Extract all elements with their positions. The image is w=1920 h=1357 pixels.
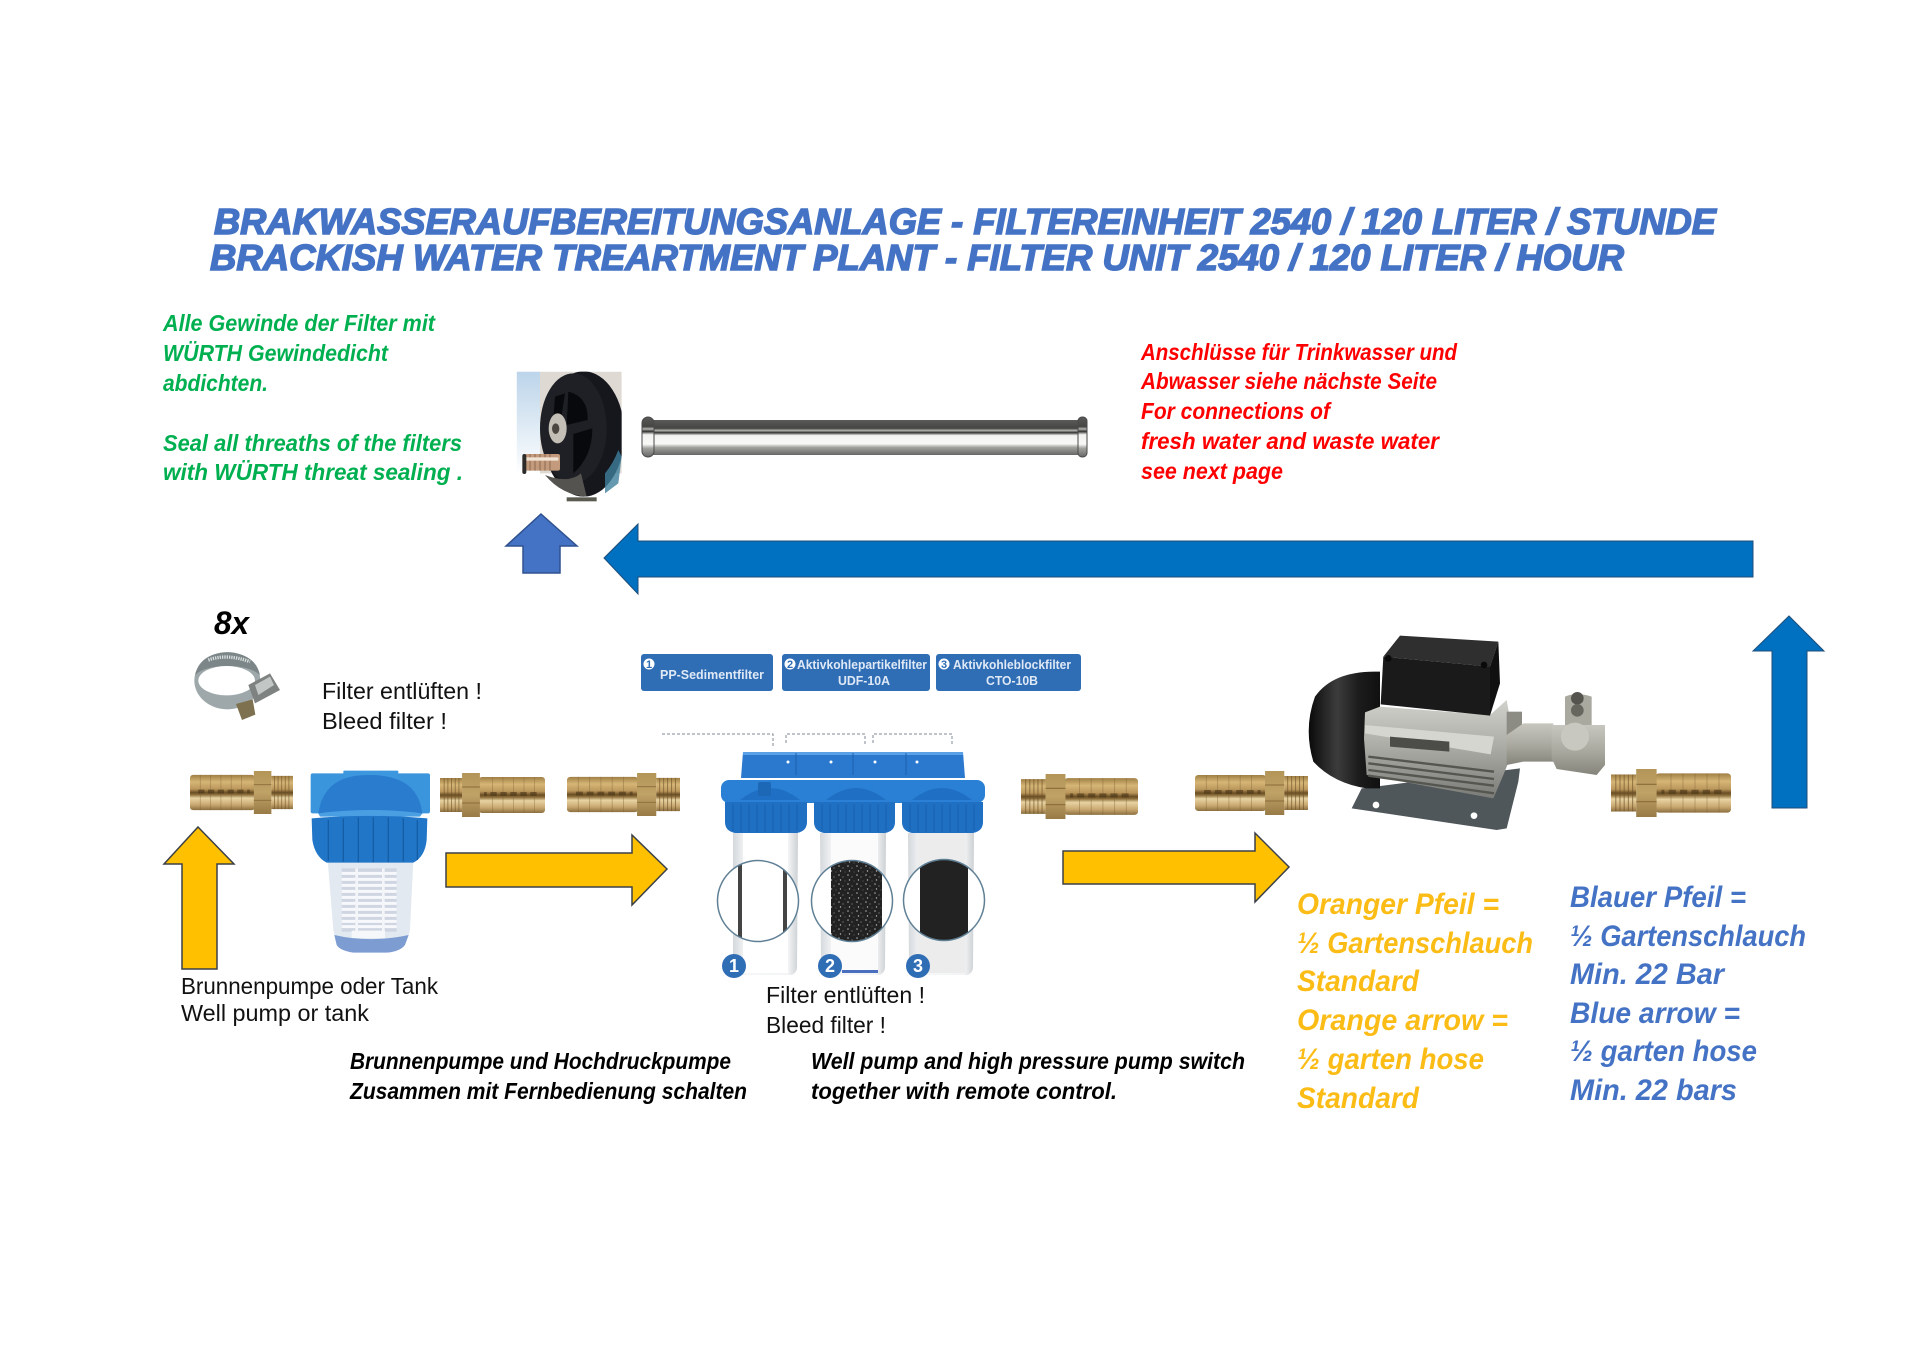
arrow: blue up right [1753, 616, 1824, 808]
text: well pump or tank: Brunnenpumpe oder Tank [181, 973, 438, 999]
legend: blue arrow: Min. 22 bars [1570, 1074, 1737, 1107]
text: pumps remote control English: together with remote control. [811, 1078, 1117, 1104]
legend: orange arrow: Orange arrow = [1297, 1004, 1508, 1037]
text: bleed filter 2 [766, 982, 925, 1038]
dashed flow lines [662, 734, 952, 746]
number badge 1 [722, 954, 746, 978]
single pre-filter [311, 771, 430, 953]
label: activated carbon particle filter: Aktivkohlepartikelfilter [797, 658, 927, 672]
legend: blue arrow: ½ garten hose [1570, 1035, 1757, 1068]
text: pumps remote control German: Brunnenpumpe und Hochdruckpumpe [350, 1048, 731, 1074]
text: well pump or tank: Well pump or tank [181, 1000, 370, 1026]
text: pumps remote control German: Zusammen mit Fernbedienung schalten [349, 1078, 747, 1104]
legend: orange arrow: Standard [1297, 1082, 1420, 1115]
icon: hose clamp [194, 652, 280, 720]
number badge 2 [818, 954, 842, 978]
legend: orange arrow: Oranger Pfeil = [1297, 888, 1499, 921]
green note: seal threads [162, 310, 463, 485]
title: BRACKISH WATER TREARTMENT PLANT - FILTER UNIT 2540 / 120 LITER / HOUR [210, 237, 1624, 278]
legend: orange arrow: Standard [1297, 965, 1420, 998]
title [210, 201, 1717, 278]
brass fitting 2 [440, 773, 545, 817]
legend: orange arrow: ½ garten hose [1297, 1043, 1484, 1076]
magnifier circle 2 [811, 855, 893, 945]
title: BRAKWASSERAUFBEREITUNGSANLAGE - FILTEREINHEIT 2540 / 120 LITER / STUNDE [214, 201, 1717, 242]
brass fitting 3 [567, 773, 680, 816]
label: activated carbon block filter: 3 [941, 659, 947, 671]
text: well pump or tank [181, 973, 438, 1026]
text: bleed filter 1: Bleed filter ! [322, 708, 447, 734]
legend: orange arrow [1297, 888, 1533, 1115]
brass fitting 5 [1195, 771, 1308, 815]
label: activated carbon block filter: Aktivkohleblockfilter [953, 658, 1071, 672]
text: bleed filter 2: Bleed filter ! [766, 1012, 886, 1038]
legend: blue arrow: Blauer Pfeil = [1570, 881, 1746, 914]
magnifier circle 3 [903, 855, 985, 945]
text: pumps remote control English [811, 1048, 1245, 1104]
arrow: orange up [164, 827, 234, 969]
green note: seal threads: WÜRTH Gewindedicht [163, 340, 389, 366]
label: PP sediment filter: PP-Sedimentfilter [660, 668, 764, 682]
text: pumps remote control English: Well pump and high pressure pump switch [811, 1048, 1245, 1074]
magnifier circle 1 [717, 855, 799, 945]
red note: connections: see next page [1141, 458, 1283, 484]
legend: blue arrow: Min. 22 Bar [1570, 958, 1726, 991]
label: PP sediment filter: 1 [646, 659, 652, 671]
legend: blue arrow: ½ Gartenschlauch [1570, 920, 1806, 953]
arrow: orange right 1 [446, 835, 667, 905]
stainless membrane tube [642, 417, 1087, 457]
brass fitting 4 [1021, 774, 1138, 819]
label: activated carbon particle filter: 2 [787, 659, 793, 671]
red note: connections: fresh water and waste water [1141, 428, 1440, 454]
text: bleed filter 1: Filter entlüften ! [322, 678, 482, 704]
red note: connections: Anschlüsse für Trinkwasser und [1140, 339, 1458, 365]
green note: seal threads: abdichten. [163, 370, 268, 396]
number badge 1: 1 [729, 956, 739, 976]
bowls [733, 833, 974, 975]
green note: seal threads: Alle Gewinde der Filter mit [162, 310, 436, 336]
arrow: small blue up [506, 514, 577, 573]
red note: connections: Abwasser siehe nächste Seite [1140, 368, 1437, 394]
membrane housing end cap [517, 371, 624, 503]
legend: orange arrow: ½ Gartenschlauch [1297, 927, 1533, 960]
blue head and collars [721, 752, 985, 833]
legend: blue arrow [1570, 881, 1806, 1107]
triple filter unit [662, 734, 985, 978]
green note: seal threads: with WÜRTH threat sealing . [163, 459, 463, 485]
label: PP sediment filter [641, 654, 773, 691]
red note: connections: For connections of [1141, 398, 1332, 424]
red note: connections [1140, 339, 1458, 484]
label: activated carbon particle filter: UDF-10A [838, 674, 890, 688]
number badge 2: 2 [825, 956, 835, 976]
green note: seal threads: Seal all threaths of the filters [163, 430, 462, 456]
number badge 3: 3 [913, 956, 923, 976]
label: activated carbon block filter [936, 654, 1081, 691]
number badge 3 [906, 954, 930, 978]
brass fitting 6 [1611, 769, 1731, 817]
text: pumps remote control German [349, 1048, 747, 1104]
pump and motor [1309, 636, 1605, 830]
filter labels [641, 654, 1081, 691]
brass fitting 1 [190, 771, 293, 814]
legend: blue arrow: Blue arrow = [1570, 997, 1740, 1030]
text: bleed filter 2: Filter entlüften ! [766, 982, 925, 1008]
arrow: orange right 2 [1063, 833, 1289, 902]
label: activated carbon block filter: CTO-10B [986, 674, 1038, 688]
quantity label 8x: 8x [214, 605, 250, 641]
arrow: long blue left [604, 524, 1753, 594]
label: activated carbon particle filter [782, 654, 930, 691]
text: bleed filter 1 [322, 678, 482, 734]
